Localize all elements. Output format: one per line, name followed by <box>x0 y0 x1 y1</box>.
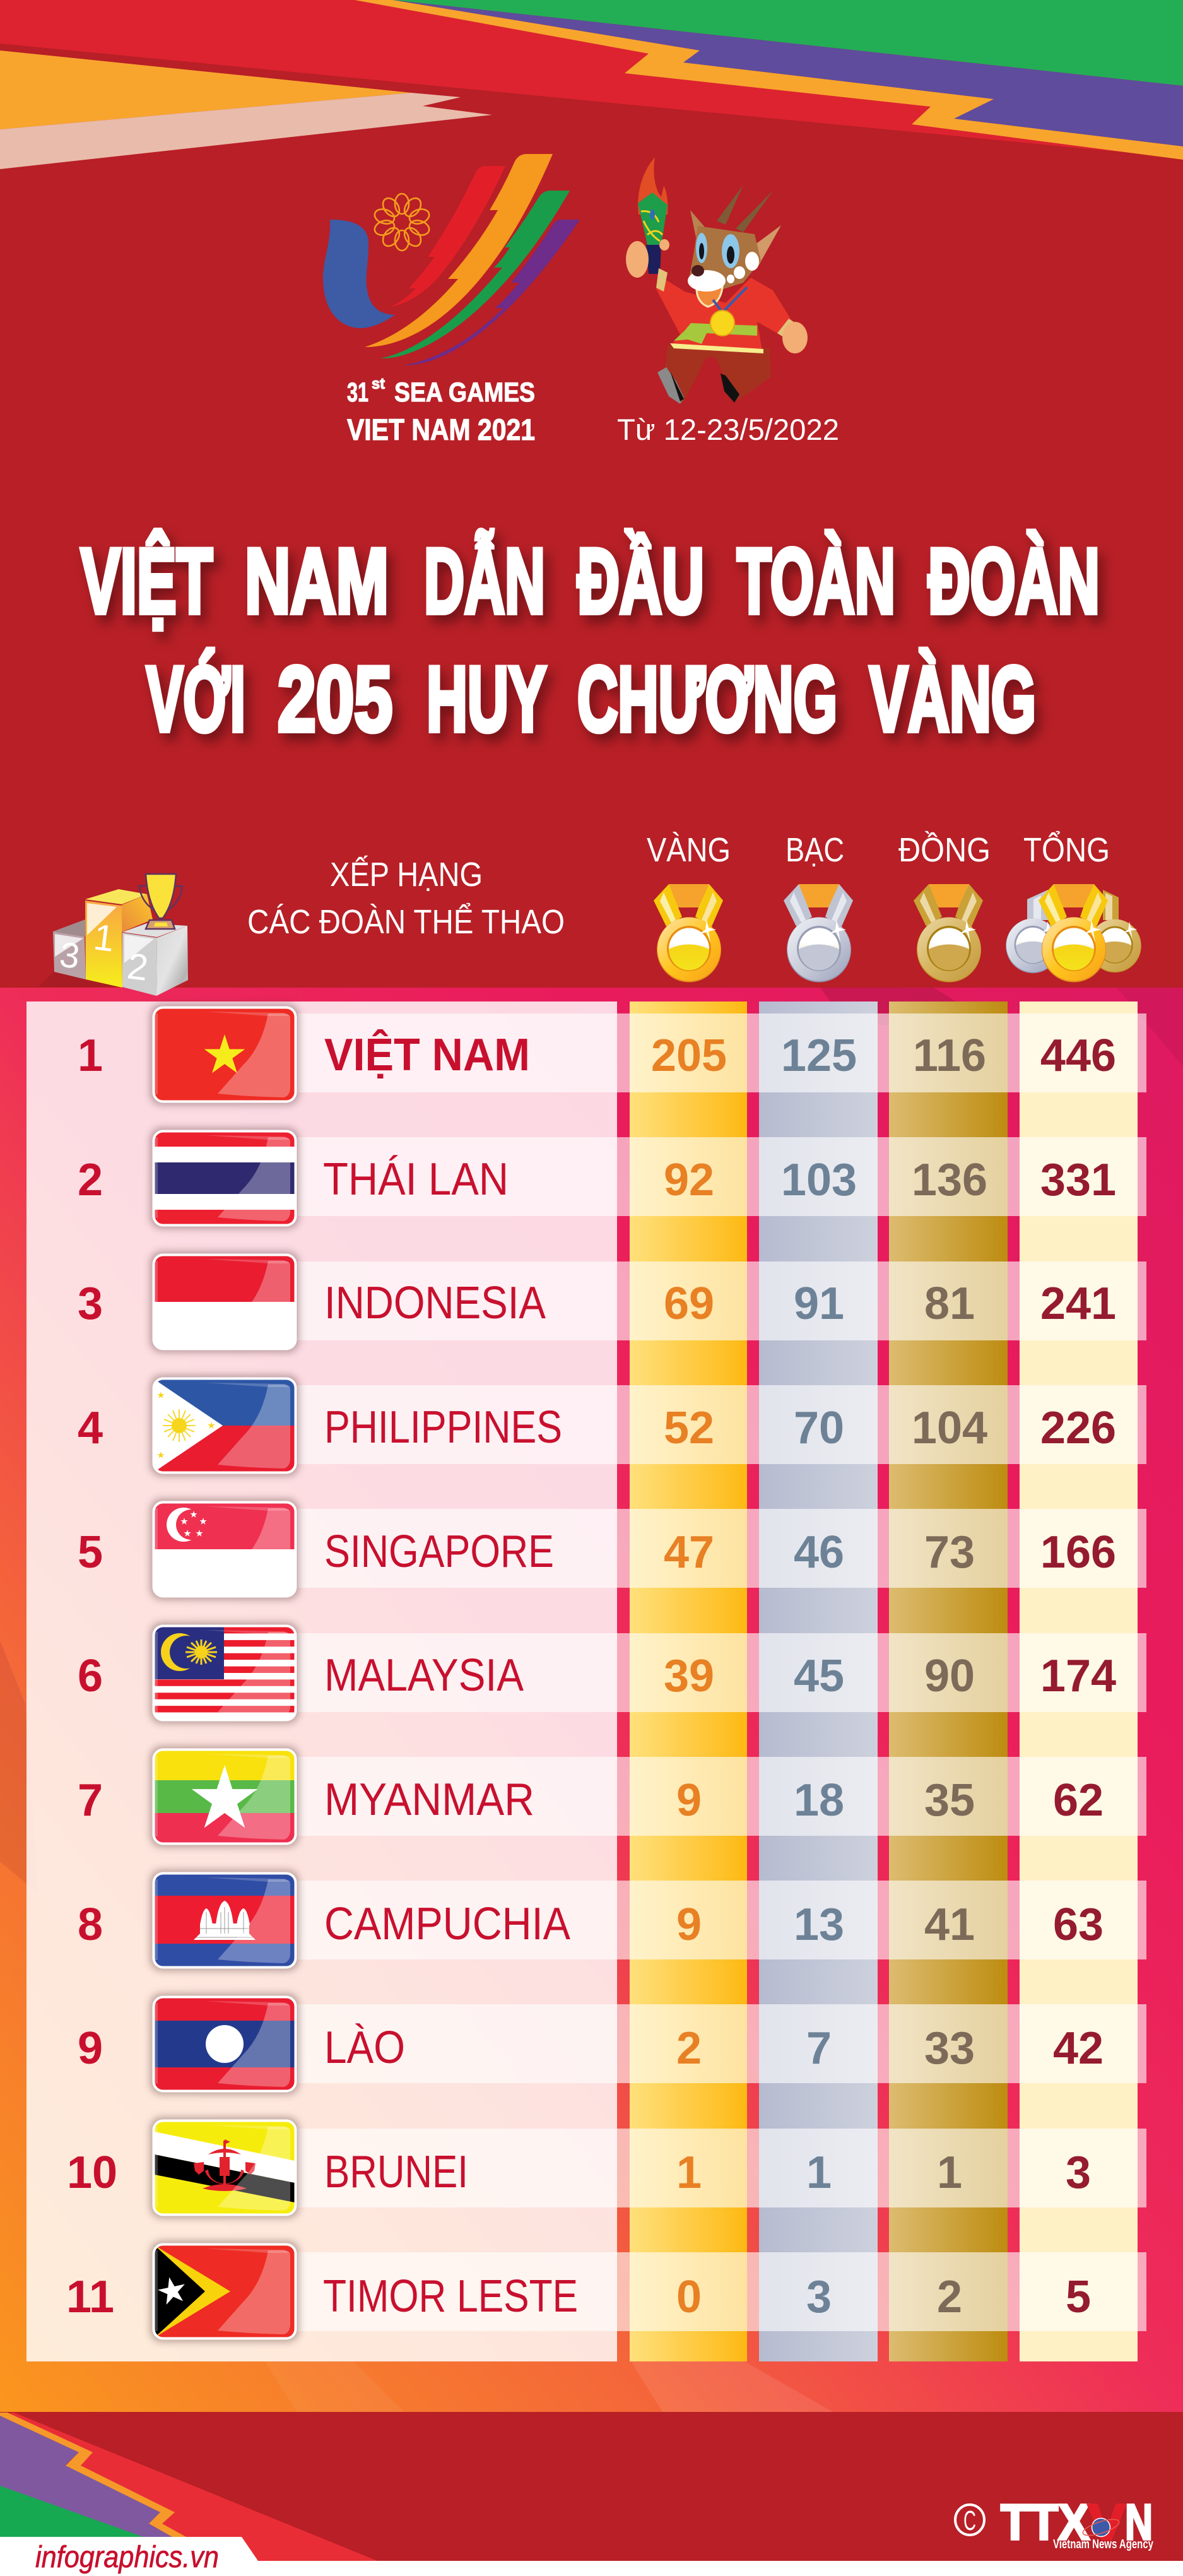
rank: 7 <box>78 1775 103 1826</box>
sleeve cuff <box>656 268 668 292</box>
table: silver column <box>759 1001 878 2361</box>
podium with trophy: 1 <box>91 916 117 960</box>
logo: blue swoosh <box>323 220 395 328</box>
waist trim <box>670 343 763 353</box>
table: gold column <box>630 1001 747 2361</box>
footer decorative ribbons <box>0 2413 377 2561</box>
row strip <box>298 2129 1146 2207</box>
medal counts: 125 <box>781 1031 857 1081</box>
medal counts: 3 <box>806 2272 832 2322</box>
row 4: Philippines <box>78 1375 1146 1476</box>
medal counts: 52 <box>664 1403 714 1453</box>
column header: bronze: ĐỒNG <box>898 831 991 869</box>
eyes <box>696 233 707 263</box>
pants <box>664 346 771 403</box>
medal counts: 241 <box>1040 1279 1116 1329</box>
flag: Brunei <box>150 2117 299 2218</box>
medal counts: 2 <box>676 2023 702 2074</box>
icon: gold medal <box>654 884 723 982</box>
medal counts: 81 <box>924 1279 975 1329</box>
medal counts: 174 <box>1040 1651 1116 1701</box>
medal counts: 5 <box>1066 2272 1091 2322</box>
medal <box>713 287 747 312</box>
podium with trophy: 2 <box>125 945 150 989</box>
country name: MALAYSIA <box>324 1650 524 1701</box>
row 3: Indonesia <box>78 1251 1146 1352</box>
country name: CAMPUCHIA <box>324 1899 570 1949</box>
row strip <box>298 1013 1146 1092</box>
row 6: Malaysia <box>78 1622 1146 1723</box>
rank: 10 <box>67 2148 117 2198</box>
title: HUY <box>427 647 546 750</box>
medal counts <box>651 1031 1116 1081</box>
logo: orange stroke <box>365 154 553 347</box>
TTXVN wordmark <box>1001 2494 1153 2550</box>
row strip <box>298 1137 1146 1216</box>
table: total column <box>1020 1001 1138 2361</box>
medal counts: 166 <box>1040 1527 1116 1578</box>
column header: silver: BẠC <box>786 831 844 869</box>
rank: 9 <box>78 2023 103 2074</box>
flag: Malaysia <box>150 1622 299 1723</box>
header: ranking label <box>247 856 565 941</box>
medal counts <box>664 1403 1116 1453</box>
rank: 3 <box>78 1279 103 1329</box>
country name: PHILIPPINES <box>324 1402 562 1453</box>
rank: 1 <box>78 1031 103 1081</box>
TTXVN wordmark: V <box>1088 2494 1126 2550</box>
medal counts: 73 <box>924 1527 975 1578</box>
medal counts: 446 <box>1040 1031 1116 1081</box>
medal counts: 2 <box>937 2272 962 2322</box>
flag: Singapore <box>150 1499 299 1600</box>
medal counts: 3 <box>1066 2148 1091 2198</box>
medal counts: 69 <box>664 1279 714 1329</box>
copyright mark: C <box>963 2505 976 2536</box>
country name: INDONESIA <box>324 1278 546 1328</box>
medal counts <box>676 1900 1104 1950</box>
TTXVN wordmark: N <box>1125 2494 1153 2550</box>
title: 205 <box>278 647 392 750</box>
torch flame <box>638 157 668 215</box>
podium with trophy: 3 <box>57 934 82 976</box>
copyright mark <box>955 2505 984 2536</box>
flag: Laos <box>150 1994 299 2094</box>
TTXVN wordmark: TTX <box>1001 2494 1090 2550</box>
shirt <box>656 278 792 350</box>
medal counts: 226 <box>1040 1403 1116 1453</box>
logo caption: 31st SEA GAMES VIET NAM 2021: SEA GAMES <box>394 377 535 408</box>
row strip <box>298 1509 1146 1588</box>
medal counts: 42 <box>1053 2023 1104 2074</box>
row strip <box>298 1385 1146 1464</box>
website tag <box>0 2537 258 2576</box>
medal counts: 1 <box>937 2148 962 2198</box>
flag: Timor Leste <box>150 2241 299 2342</box>
medal counts: 9 <box>676 1900 702 1950</box>
row 5: Singapore <box>78 1499 1146 1600</box>
website tag: infographics.vn <box>35 2541 219 2574</box>
logo caption: 31st SEA GAMES VIET NAM 2021: st <box>372 375 385 393</box>
event date: Từ 12-23/5/2022 <box>617 413 839 446</box>
medal counts: 46 <box>794 1527 844 1578</box>
torch head <box>638 192 668 245</box>
medal counts: 0 <box>676 2272 702 2322</box>
snout <box>688 270 726 292</box>
medal counts: 331 <box>1040 1155 1116 1205</box>
medal counts: 9 <box>676 1775 702 1826</box>
medal counts: 116 <box>913 1031 986 1081</box>
copyright and TTXVN logo <box>955 2494 1154 2551</box>
medal counts <box>664 1279 1116 1329</box>
flag: Vietnam <box>150 1004 299 1105</box>
medal counts: 63 <box>1053 1900 1104 1950</box>
medal counts: 104 <box>912 1403 987 1453</box>
row 2: Thái Lan <box>78 1128 1146 1229</box>
medal counts: 1 <box>676 2148 702 2198</box>
medal counts: 1 <box>806 2148 832 2198</box>
medal counts: 92 <box>664 1155 714 1205</box>
fist <box>626 241 649 278</box>
flag: Cambodia <box>150 1870 299 1971</box>
header colour ribbons <box>0 0 1183 169</box>
medal counts: 91 <box>794 1279 844 1329</box>
row strip <box>298 1633 1146 1712</box>
table: bronze column <box>889 1001 1008 2361</box>
medal counts <box>676 2272 1091 2322</box>
medal counts: 35 <box>924 1775 975 1826</box>
icon: bronze medal <box>914 884 983 982</box>
title: CHƯƠNG <box>577 647 837 750</box>
medal counts <box>664 1527 1116 1578</box>
flag: Myanmar <box>150 1746 299 1847</box>
country name: VIỆT NAM <box>324 1029 530 1080</box>
title: DẪN <box>424 529 545 632</box>
row 7: Myanmar <box>78 1746 1146 1847</box>
row strip <box>298 2252 1146 2331</box>
head <box>688 226 761 292</box>
icon: all three medals <box>1006 884 1141 982</box>
flag: Thailand <box>150 1128 299 1229</box>
row 9: Lào <box>78 1994 1146 2094</box>
title: VIỆT <box>81 529 213 632</box>
logo caption: 31st SEA GAMES VIET NAM 2021: VIET NAM 2021 <box>347 413 535 446</box>
medal counts: 47 <box>664 1527 714 1578</box>
rank: 4 <box>78 1403 103 1453</box>
medal counts: 13 <box>794 1900 844 1950</box>
rank: 11 <box>66 2272 114 2322</box>
country name: MYANMAR <box>324 1775 534 1825</box>
logo caption: 31st SEA GAMES VIET NAM 2021 <box>347 375 535 446</box>
medal counts: 70 <box>794 1403 844 1453</box>
right hand <box>782 322 808 353</box>
row strip <box>298 2004 1146 2083</box>
medal counts: 205 <box>651 1031 727 1081</box>
medal counts: 33 <box>924 2023 975 2074</box>
medal counts <box>664 1651 1116 1701</box>
medal counts: 7 <box>806 2023 832 2074</box>
country name: TIMOR LESTE <box>323 2271 578 2322</box>
column header: gold: VÀNG <box>647 831 731 869</box>
medal counts: 41 <box>924 1900 975 1950</box>
sash <box>674 323 757 344</box>
medal counts <box>664 1155 1116 1205</box>
title: ĐẦU <box>577 529 704 632</box>
table: country column panel <box>26 1001 617 2361</box>
logo: purple stroke <box>403 220 580 365</box>
rank: 2 <box>78 1155 103 1205</box>
logo: green stroke <box>380 191 570 358</box>
medal counts <box>676 2148 1091 2198</box>
agency name: Vietnam News Agency <box>1053 2538 1154 2551</box>
row strip <box>298 1757 1146 1836</box>
title: NAM <box>245 529 389 632</box>
row strip <box>298 1261 1146 1340</box>
logo caption: 31st SEA GAMES VIET NAM 2021: 31 <box>347 377 368 408</box>
medal counts: 103 <box>781 1155 857 1205</box>
flag: Indonesia <box>150 1251 299 1352</box>
medal counts <box>676 2023 1104 2074</box>
medal counts: 90 <box>924 1651 975 1701</box>
country name: SINGAPORE <box>324 1527 554 1577</box>
header: ranking label: XẾP HẠNG <box>330 856 483 894</box>
header: ranking label: CÁC ĐOÀN THỂ THAO <box>247 903 565 941</box>
rank: 5 <box>78 1527 103 1578</box>
horns <box>717 185 743 225</box>
row 10: Brunei <box>67 2117 1146 2218</box>
ears <box>690 210 713 252</box>
mouth <box>697 287 722 307</box>
row strip <box>298 1881 1146 1959</box>
logo: red stroke <box>389 166 505 307</box>
country name: THÁI LAN <box>323 1154 509 1205</box>
medal counts: 18 <box>794 1775 844 1826</box>
rank: 8 <box>78 1900 103 1950</box>
medal counts: 45 <box>794 1651 844 1701</box>
icon: silver medal <box>784 884 853 982</box>
rank: 6 <box>78 1651 103 1701</box>
medal counts: 39 <box>664 1651 714 1701</box>
medal counts: 62 <box>1053 1775 1104 1826</box>
torch handle <box>646 245 661 274</box>
title: TOÀN <box>737 529 895 632</box>
flag: Philippines <box>150 1375 299 1476</box>
logo: lotus flower <box>373 194 431 251</box>
title: VÀNG <box>869 647 1036 750</box>
podium with trophy <box>38 874 188 996</box>
title: VỚI <box>146 647 245 750</box>
mascot: Sao La with torch <box>626 157 808 404</box>
colourful table background band <box>0 988 1183 2412</box>
white bottom edge <box>0 2561 1183 2576</box>
cheek spots <box>745 252 759 271</box>
row 8: Campuchia <box>78 1870 1146 1971</box>
medal counts <box>676 1775 1104 1826</box>
title <box>81 529 1100 750</box>
SEA Games logo <box>323 154 580 365</box>
nose <box>692 265 704 276</box>
row 1: Việt Nam <box>78 1004 1146 1105</box>
shoes <box>657 367 684 404</box>
column header: total: TỔNG <box>1023 831 1110 869</box>
globe <box>1081 2516 1121 2539</box>
country name: LÀO <box>324 2023 405 2073</box>
row 11: Timor Leste <box>66 2241 1146 2342</box>
medal counts: 136 <box>912 1155 987 1205</box>
country name: BRUNEI <box>324 2147 468 2197</box>
